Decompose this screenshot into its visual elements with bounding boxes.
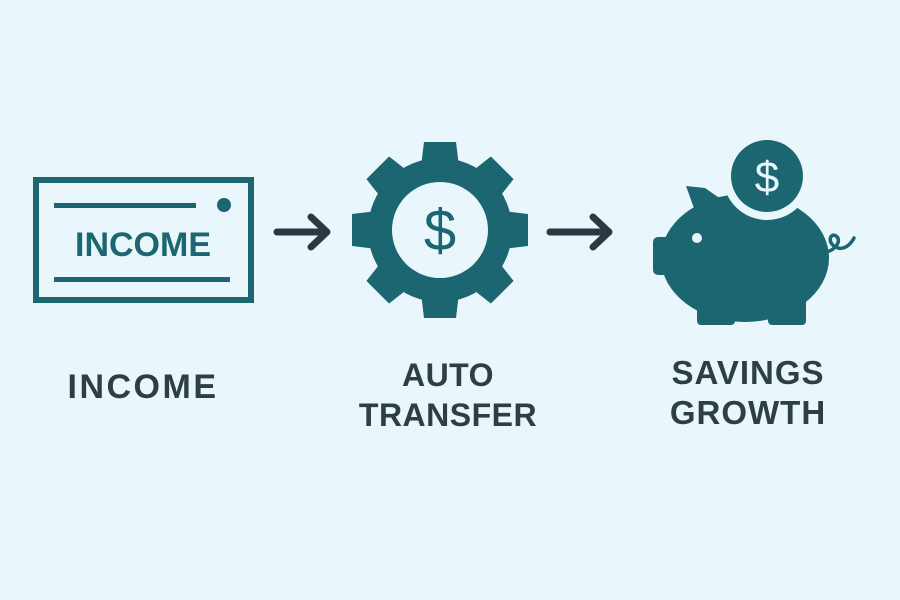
icon: income check xyxy=(36,180,251,300)
icon: gear with dollar xyxy=(352,142,528,318)
icon: income check: INCOME xyxy=(75,226,211,264)
label: auto transfer: TRANSFER xyxy=(359,397,537,433)
label: savings growth: GROWTH xyxy=(670,394,826,431)
arrow 1 xyxy=(277,217,327,247)
label: auto transfer: AUTO xyxy=(402,357,494,393)
icon: piggy bank with coin xyxy=(653,132,854,325)
label: income: INCOME xyxy=(68,368,218,406)
icon: piggy bank with coin: $ xyxy=(755,153,779,202)
arrow 2 xyxy=(550,217,609,247)
icon: gear with dollar: $ xyxy=(424,198,456,263)
label: savings growth: SAVINGS xyxy=(671,354,825,391)
